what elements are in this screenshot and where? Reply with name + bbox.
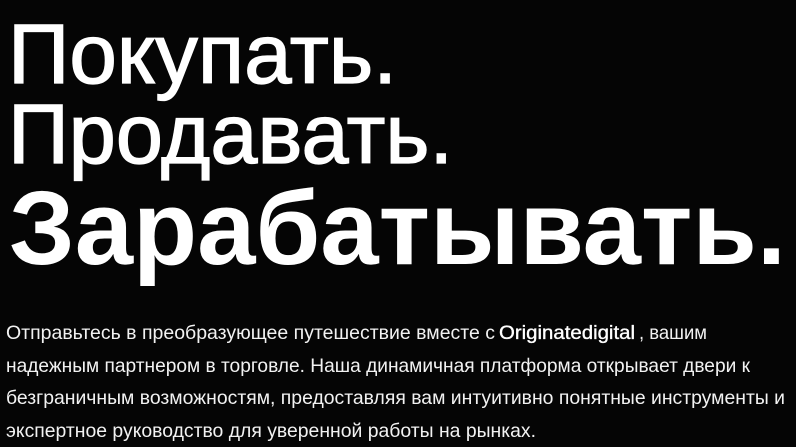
brand name: Originatedigital xyxy=(499,322,635,344)
body line 1 end: , вашим xyxy=(639,322,707,344)
body text block xyxy=(6,322,785,442)
title xyxy=(8,7,786,287)
title line: Покупать: Покупать. xyxy=(8,7,397,101)
body line 2: надежным партнером в торговле. Наша динамичная платформа открывает двери к xyxy=(6,355,750,377)
title line: Зарабатывать: Зарабатывать. xyxy=(9,170,786,287)
title line: Продавать: Продавать. xyxy=(8,87,453,181)
body line 3: безграничным возможностям, предоставляя вам интуитивно понятные инструменты и xyxy=(6,387,785,409)
body line 4: экспертное руководство для уверенной работы на рынках. xyxy=(6,420,536,442)
body line 1 start: Отправьтесь в преобразующее путешествие вместе с xyxy=(6,322,495,344)
